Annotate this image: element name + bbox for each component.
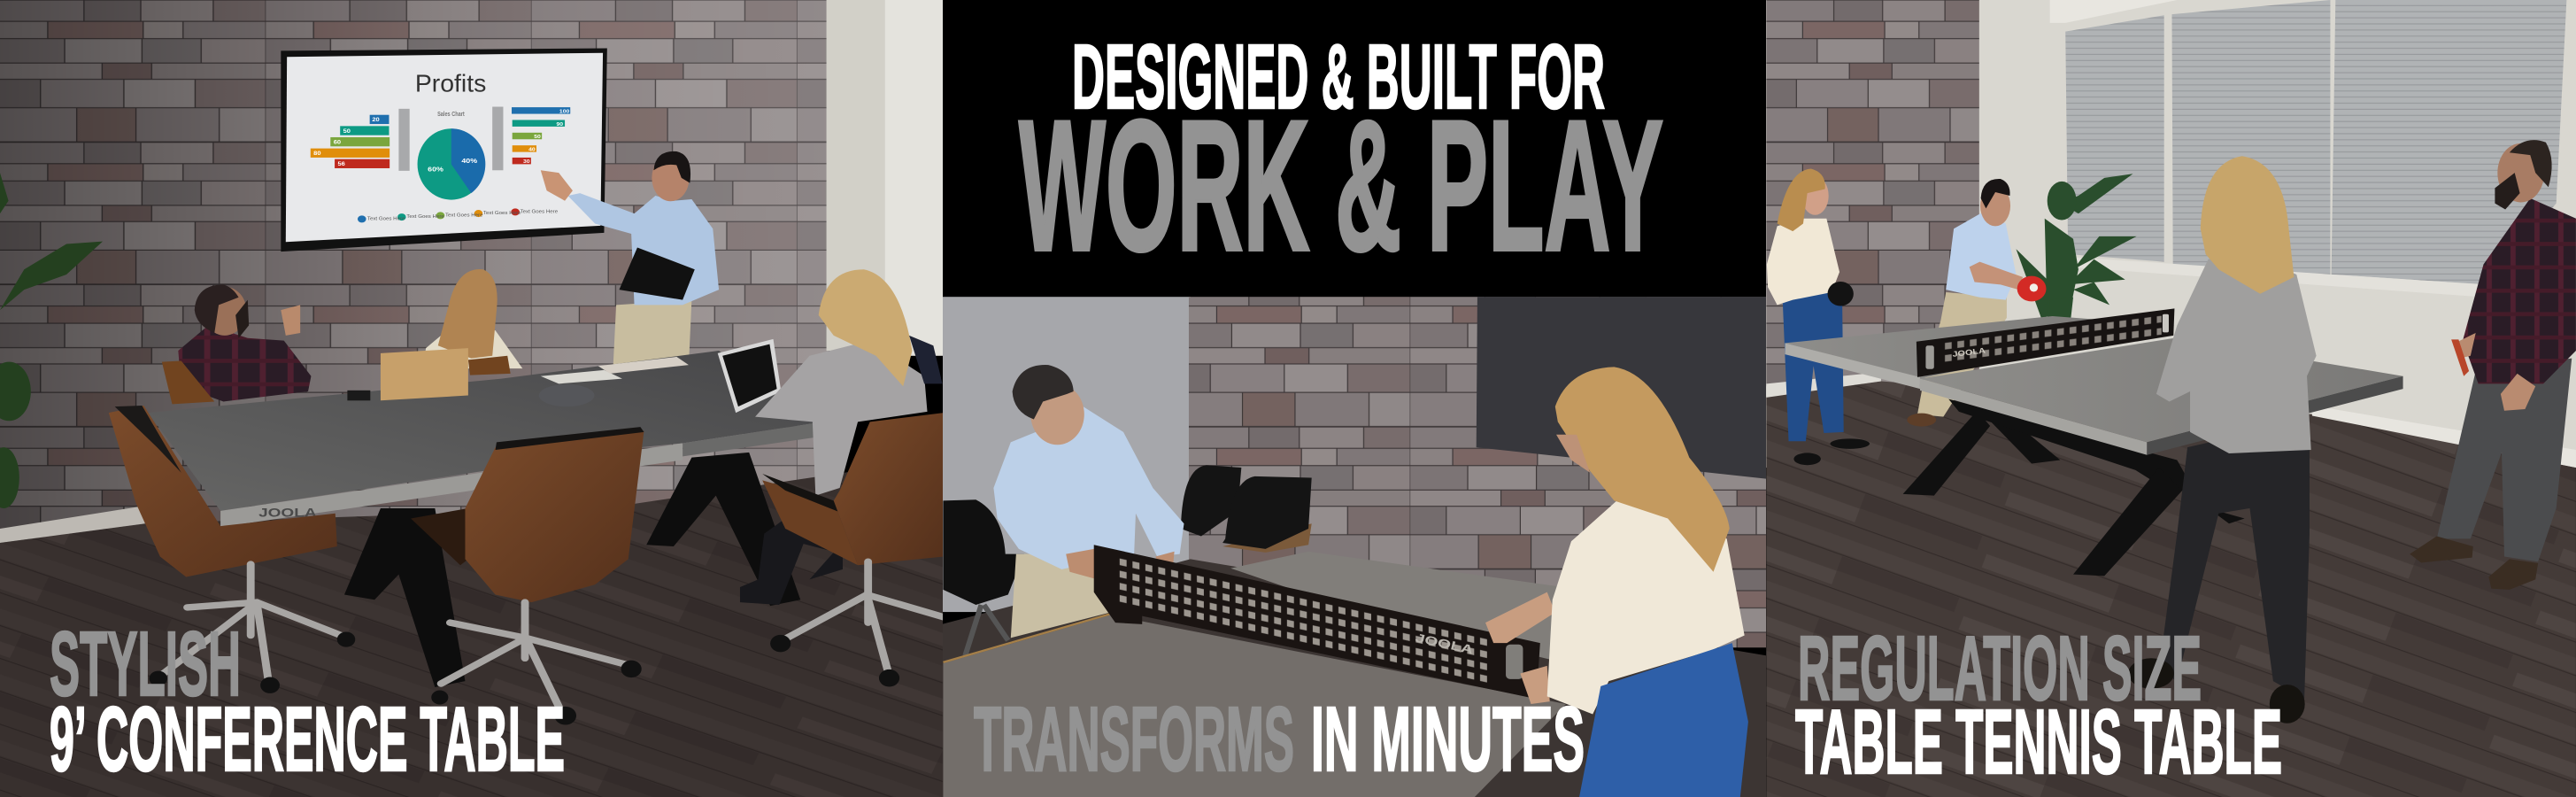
- pie chart: 40%: [461, 158, 478, 165]
- left bars: 20: [372, 118, 380, 123]
- chart legend: Text Goes Here: [521, 210, 558, 214]
- items on table: [347, 348, 689, 406]
- panel: net setup photo: [943, 297, 1766, 797]
- windows with blinds: [2050, 0, 2566, 298]
- header band: [943, 0, 1766, 297]
- table rear half: [1230, 552, 1563, 661]
- left bars: 56: [337, 162, 345, 167]
- conference table top: [148, 351, 817, 527]
- table net: [1917, 308, 2174, 377]
- right bars: 90: [557, 121, 564, 128]
- man with plaid shirt: [2410, 140, 2576, 590]
- table edge highlight: [943, 614, 1110, 662]
- caption: regulation size table tennis table: [1795, 617, 2282, 793]
- plant: [2016, 174, 2137, 321]
- left bars: [311, 115, 389, 168]
- black chairs: [943, 465, 1312, 655]
- floor: [938, 559, 1767, 797]
- grey wall: [938, 297, 1191, 612]
- chart legend: Text Goes Here: [445, 213, 482, 218]
- seated man: [178, 284, 311, 401]
- right bars: 50: [534, 135, 541, 140]
- chart legend: Text Goes Here: [483, 212, 521, 216]
- caption: transforms in minutes: IN MINUTES: [1311, 688, 1585, 790]
- panel: table tennis photo: [1766, 0, 2576, 797]
- right bars: 40: [528, 147, 536, 152]
- stone wall: [0, 0, 829, 538]
- right bars: 30: [523, 159, 530, 165]
- text: 9’ CONFERENCE TABLE: [50, 688, 565, 790]
- pie chart: [418, 128, 485, 200]
- net handle cutout: [1506, 645, 1523, 679]
- table legs: [1903, 399, 2245, 576]
- left bars: 80: [313, 151, 321, 157]
- woman adjusting net: [1485, 367, 1748, 797]
- right chair: [762, 413, 945, 686]
- net panel: [1094, 545, 1540, 699]
- floor: [0, 458, 947, 797]
- caption: transforms in minutes: TRANSFORMS: [974, 688, 1294, 790]
- presenter: [541, 151, 719, 366]
- screen heading: Profits: [415, 71, 486, 97]
- wall screen: [1477, 297, 1767, 479]
- wall-mounted screen: [281, 49, 607, 251]
- table top: [1785, 316, 2403, 455]
- right bars: 100: [559, 109, 570, 114]
- white wall: [1762, 0, 2576, 468]
- small chairs behind table: [162, 356, 511, 404]
- man adjusting net: [993, 365, 1184, 638]
- table logo: JOOLA: [258, 507, 317, 520]
- stone wall: [1766, 0, 1979, 386]
- plant: [0, 173, 103, 508]
- axis title bars: [398, 107, 503, 171]
- left chair: [109, 406, 355, 693]
- man with red paddle: [1907, 179, 2047, 427]
- net logos: JOOLA: [1952, 345, 1986, 359]
- caption: stylish conference table: STYLISH: [50, 613, 241, 715]
- chart subtitle: Sales Chart: [437, 110, 465, 118]
- caption: stylish conference table: [50, 613, 565, 790]
- woman far left: [1767, 169, 1870, 465]
- table legs: [344, 453, 800, 687]
- blonde woman in sweater: [2128, 156, 2317, 723]
- white column: [827, 0, 945, 356]
- left bars: 50: [343, 128, 351, 135]
- net logo: JOOLA: [1414, 631, 1475, 657]
- seated woman: [423, 269, 522, 368]
- table front half: [943, 615, 1566, 797]
- pie chart: 60%: [428, 166, 444, 173]
- chart legend: Text Goes Here: [367, 217, 405, 221]
- woman with laptop: [740, 269, 943, 605]
- stone wall: [1189, 297, 1768, 647]
- text: WORK & PLAY: [1019, 81, 1663, 290]
- left bars: 60: [334, 140, 341, 145]
- centre chair: [411, 427, 644, 724]
- floor: [1766, 372, 2576, 797]
- chart legend: Text Goes Here: [406, 215, 444, 220]
- chart legend: [358, 208, 558, 222]
- panel: conference table photo: [0, 0, 943, 797]
- open laptop: [718, 339, 781, 413]
- right bars: [512, 107, 570, 165]
- text: DESIGNED & BUILT FOR: [1072, 26, 1605, 128]
